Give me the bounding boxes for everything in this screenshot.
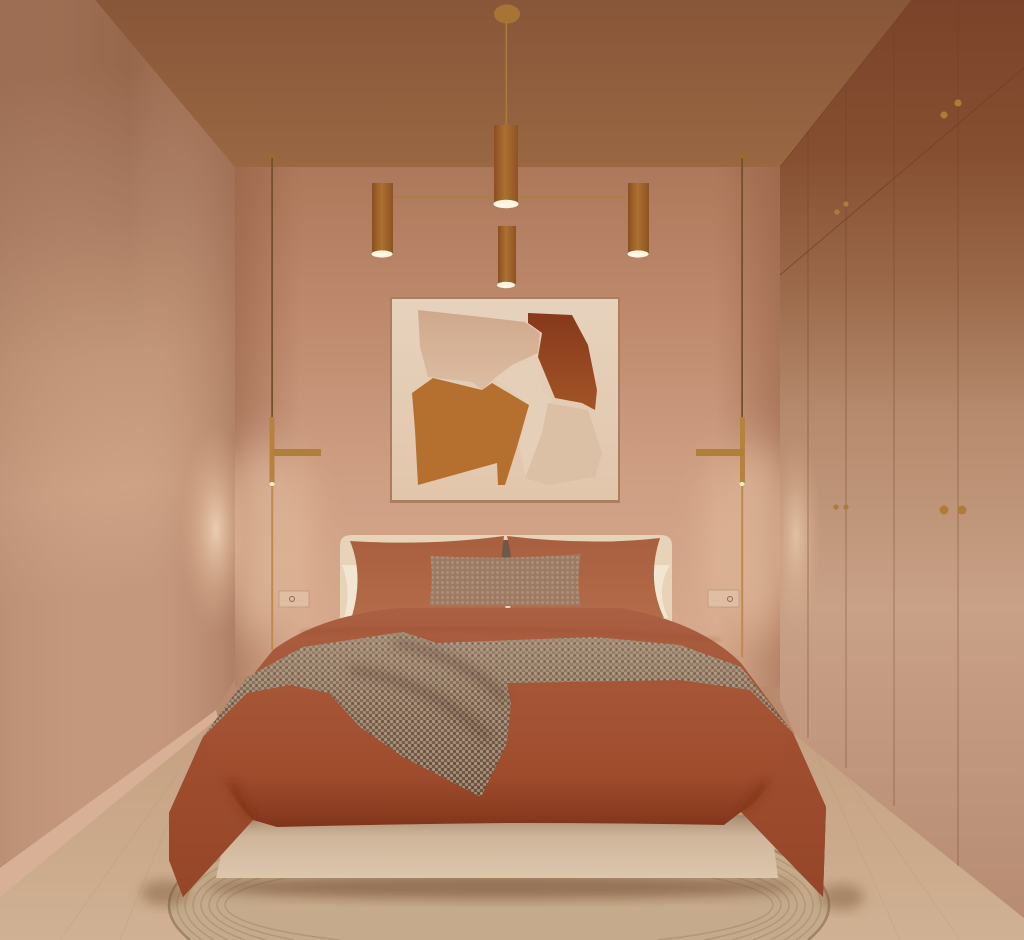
headboard (340, 535, 672, 625)
artwork (390, 297, 620, 503)
floor (0, 716, 1024, 940)
left drape (169, 737, 253, 897)
duvet (169, 608, 826, 897)
knit throw (203, 632, 793, 797)
rug (168, 804, 830, 940)
right drape (741, 733, 826, 897)
pillows (350, 536, 664, 618)
sockets (279, 590, 739, 607)
right wall sconce (696, 154, 746, 657)
wardrobes (770, 0, 1024, 918)
bed base (216, 815, 778, 878)
ceiling (95, 0, 912, 168)
pendant lamp (372, 4, 649, 288)
baseboard (0, 710, 218, 897)
handles (833, 99, 966, 515)
door seams (780, 0, 1024, 866)
left wall sconce (268, 154, 321, 650)
left wall (0, 0, 252, 868)
bed shadow (141, 875, 864, 910)
back wall (220, 167, 797, 687)
